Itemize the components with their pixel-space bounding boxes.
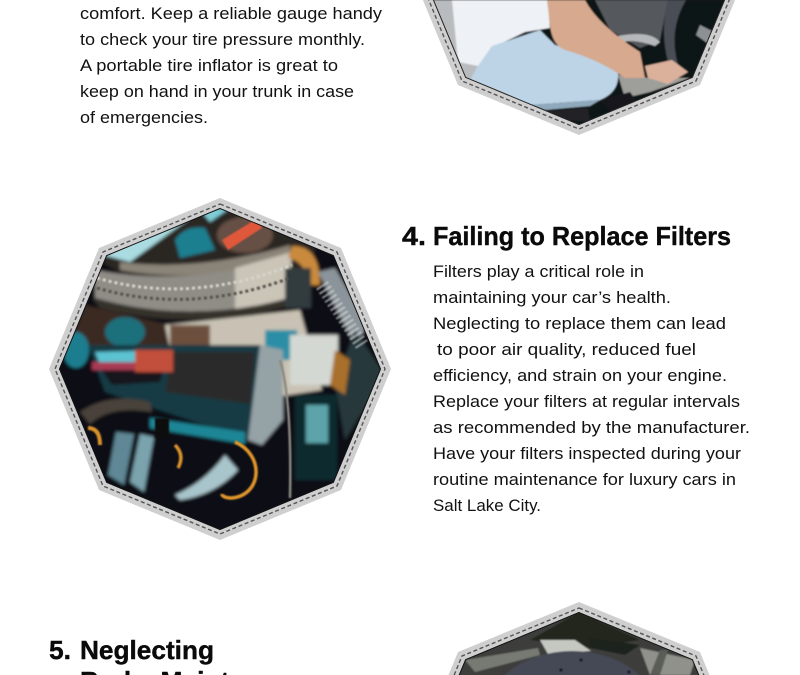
text block: filters [433, 262, 750, 515]
text block: tire pressure: A portable tire inflator is great to [80, 56, 338, 75]
text block: filters: as recommended by the manufacturer. [433, 418, 750, 437]
engine: air cleaner lid [104, 212, 317, 271]
text block: filters: Neglecting to replace them can lead [433, 314, 726, 333]
engine: below the filter [75, 303, 167, 346]
text block: filters: maintaining your car’s health. [433, 288, 671, 307]
heading: neglecting brake maintenance: Neglecting [80, 635, 214, 665]
text block: tire pressure: keep on hand in your trunk in case [80, 82, 354, 101]
engine: orange hose and corrugated pipe [288, 246, 320, 285]
text block: filters: to poor air quality, reduced fuel [437, 340, 696, 359]
step number 5: 5. [49, 635, 71, 665]
text block: tire pressure: to check your tire pressure monthly. [80, 30, 365, 49]
text block: tire pressure [80, 4, 383, 127]
text block: filters: routine maintenance for luxury cars in [433, 470, 736, 489]
text block: tire pressure: of emergencies. [80, 108, 208, 127]
photo: brake disc in octagon frame [448, 602, 710, 675]
engine: mesh filter band [95, 255, 292, 312]
engine: valve cover [88, 345, 268, 440]
photo: man checking tire pressure in octagon frame [423, 0, 735, 135]
heading: failing to replace filters: Failing to Replace Filters [433, 221, 731, 251]
text block: filters: efficiency, and strain on your engine. [433, 366, 727, 385]
text block: filters: Salt Lake City. [433, 496, 541, 515]
heading: neglecting brake maintenance [82, 640, 226, 675]
text block: filters: Have your filters inspected during your [433, 444, 741, 463]
text block: filters: Replace your filters at regular intervals [433, 392, 740, 411]
text block: filters: Filters play a critical role in [433, 262, 644, 281]
text block: tire pressure: comfort. Keep a reliable gauge handy [80, 4, 383, 23]
step number 4: 4. [402, 221, 426, 251]
photo: chrome engine in octagon frame [49, 198, 391, 540]
